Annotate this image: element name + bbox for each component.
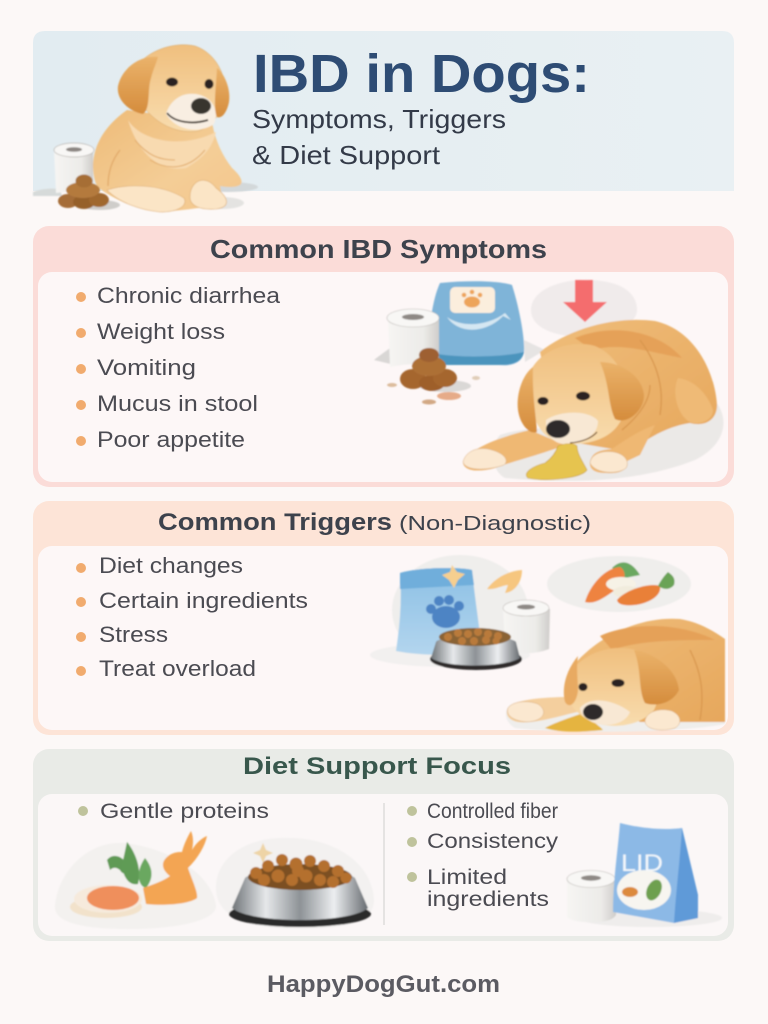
icon: food bag xyxy=(396,565,482,655)
diet list: right xyxy=(407,800,559,911)
diet list: right: Limited xyxy=(427,866,507,889)
trigger list: Certain ingredients xyxy=(99,588,308,613)
head xyxy=(528,344,626,444)
illustration: food bag, bowl, roll, vegetables and resting dog xyxy=(370,555,725,732)
panel: header banner xyxy=(33,31,734,191)
panel: common IBD symptoms xyxy=(33,226,734,487)
symptom list: Poor appetite xyxy=(97,427,245,452)
symptom list: Weight loss xyxy=(97,319,225,344)
right paw xyxy=(645,710,680,730)
trigger list: Diet changes xyxy=(99,553,243,578)
illustration: scale, roll, stool, arrow and sick dog xyxy=(374,280,723,481)
diet list: right: Consistency xyxy=(427,830,559,853)
eyes nose mouth xyxy=(166,78,178,86)
icon: food bowl xyxy=(430,628,522,670)
ears xyxy=(118,57,158,114)
dog body xyxy=(568,619,725,722)
heading: triggers xyxy=(158,509,591,536)
panel: diet support focus xyxy=(33,749,734,941)
diet list: left: Gentle proteins xyxy=(100,800,269,823)
heading: triggers: (Non-Diagnostic) xyxy=(399,513,591,535)
illustration: puppy with toilet roll and stool xyxy=(33,45,258,212)
icon: toilet roll xyxy=(374,309,439,367)
floor shadow xyxy=(506,698,725,732)
diet list: right: Controlled fiber xyxy=(427,800,558,823)
trigger list: Treat overload xyxy=(99,656,256,681)
dog body xyxy=(93,110,242,211)
carrot rabbit xyxy=(143,831,207,905)
ears xyxy=(564,656,578,705)
trigger list xyxy=(76,553,308,681)
greens xyxy=(107,856,129,874)
illustration: kibble bowl xyxy=(216,838,374,929)
face xyxy=(538,397,548,405)
subtitle line 2: & Diet Support xyxy=(252,140,441,170)
yellow puddle xyxy=(545,713,603,732)
icon: yellow arrow xyxy=(487,570,522,593)
icon: carrots xyxy=(585,562,675,605)
icon: down arrow xyxy=(563,280,607,322)
icon: LID food bag: LID xyxy=(621,850,663,877)
icon: blue scale xyxy=(428,281,545,365)
heading: symptoms: Common IBD Symptoms xyxy=(210,234,547,264)
face xyxy=(578,683,588,691)
vomit puddle xyxy=(526,444,587,480)
divider xyxy=(384,803,385,925)
front paws xyxy=(107,186,185,212)
grey backdrop bubbles xyxy=(392,555,528,665)
symptom list xyxy=(76,283,281,452)
symptom list: Mucus in stool xyxy=(97,391,258,416)
dog body xyxy=(540,320,717,452)
icon: toilet roll xyxy=(567,870,616,922)
title: IBD in Dogs: xyxy=(253,44,590,104)
footer website: HappyDogGut.com xyxy=(267,971,500,998)
symptom list: Chronic diarrhea xyxy=(97,283,281,308)
left paw xyxy=(507,697,585,722)
icon: toilet roll xyxy=(503,600,550,653)
icon: stool xyxy=(387,348,480,404)
diet list: right: ingredients xyxy=(427,888,549,911)
illustration: protein and vegetable group xyxy=(55,831,216,929)
illustration: toilet roll and LID food bag xyxy=(567,823,722,927)
subtitle line 1: Symptoms, Triggers xyxy=(252,104,506,134)
front legs xyxy=(463,430,565,471)
panel: common triggers xyxy=(33,501,734,735)
trigger list: Stress xyxy=(99,622,168,647)
heading: diet support: Diet Support Focus xyxy=(243,753,511,780)
icon: LID food bag xyxy=(613,823,698,923)
toilet roll xyxy=(54,143,94,193)
head xyxy=(565,648,658,726)
floor shadow xyxy=(493,402,723,481)
heading: triggers: Common Triggers xyxy=(158,509,392,536)
stool xyxy=(58,174,120,210)
symptom list: Vomiting xyxy=(97,355,196,380)
meat xyxy=(70,896,142,918)
head xyxy=(131,45,225,132)
ears xyxy=(518,367,537,433)
arrow bubble xyxy=(531,280,637,337)
